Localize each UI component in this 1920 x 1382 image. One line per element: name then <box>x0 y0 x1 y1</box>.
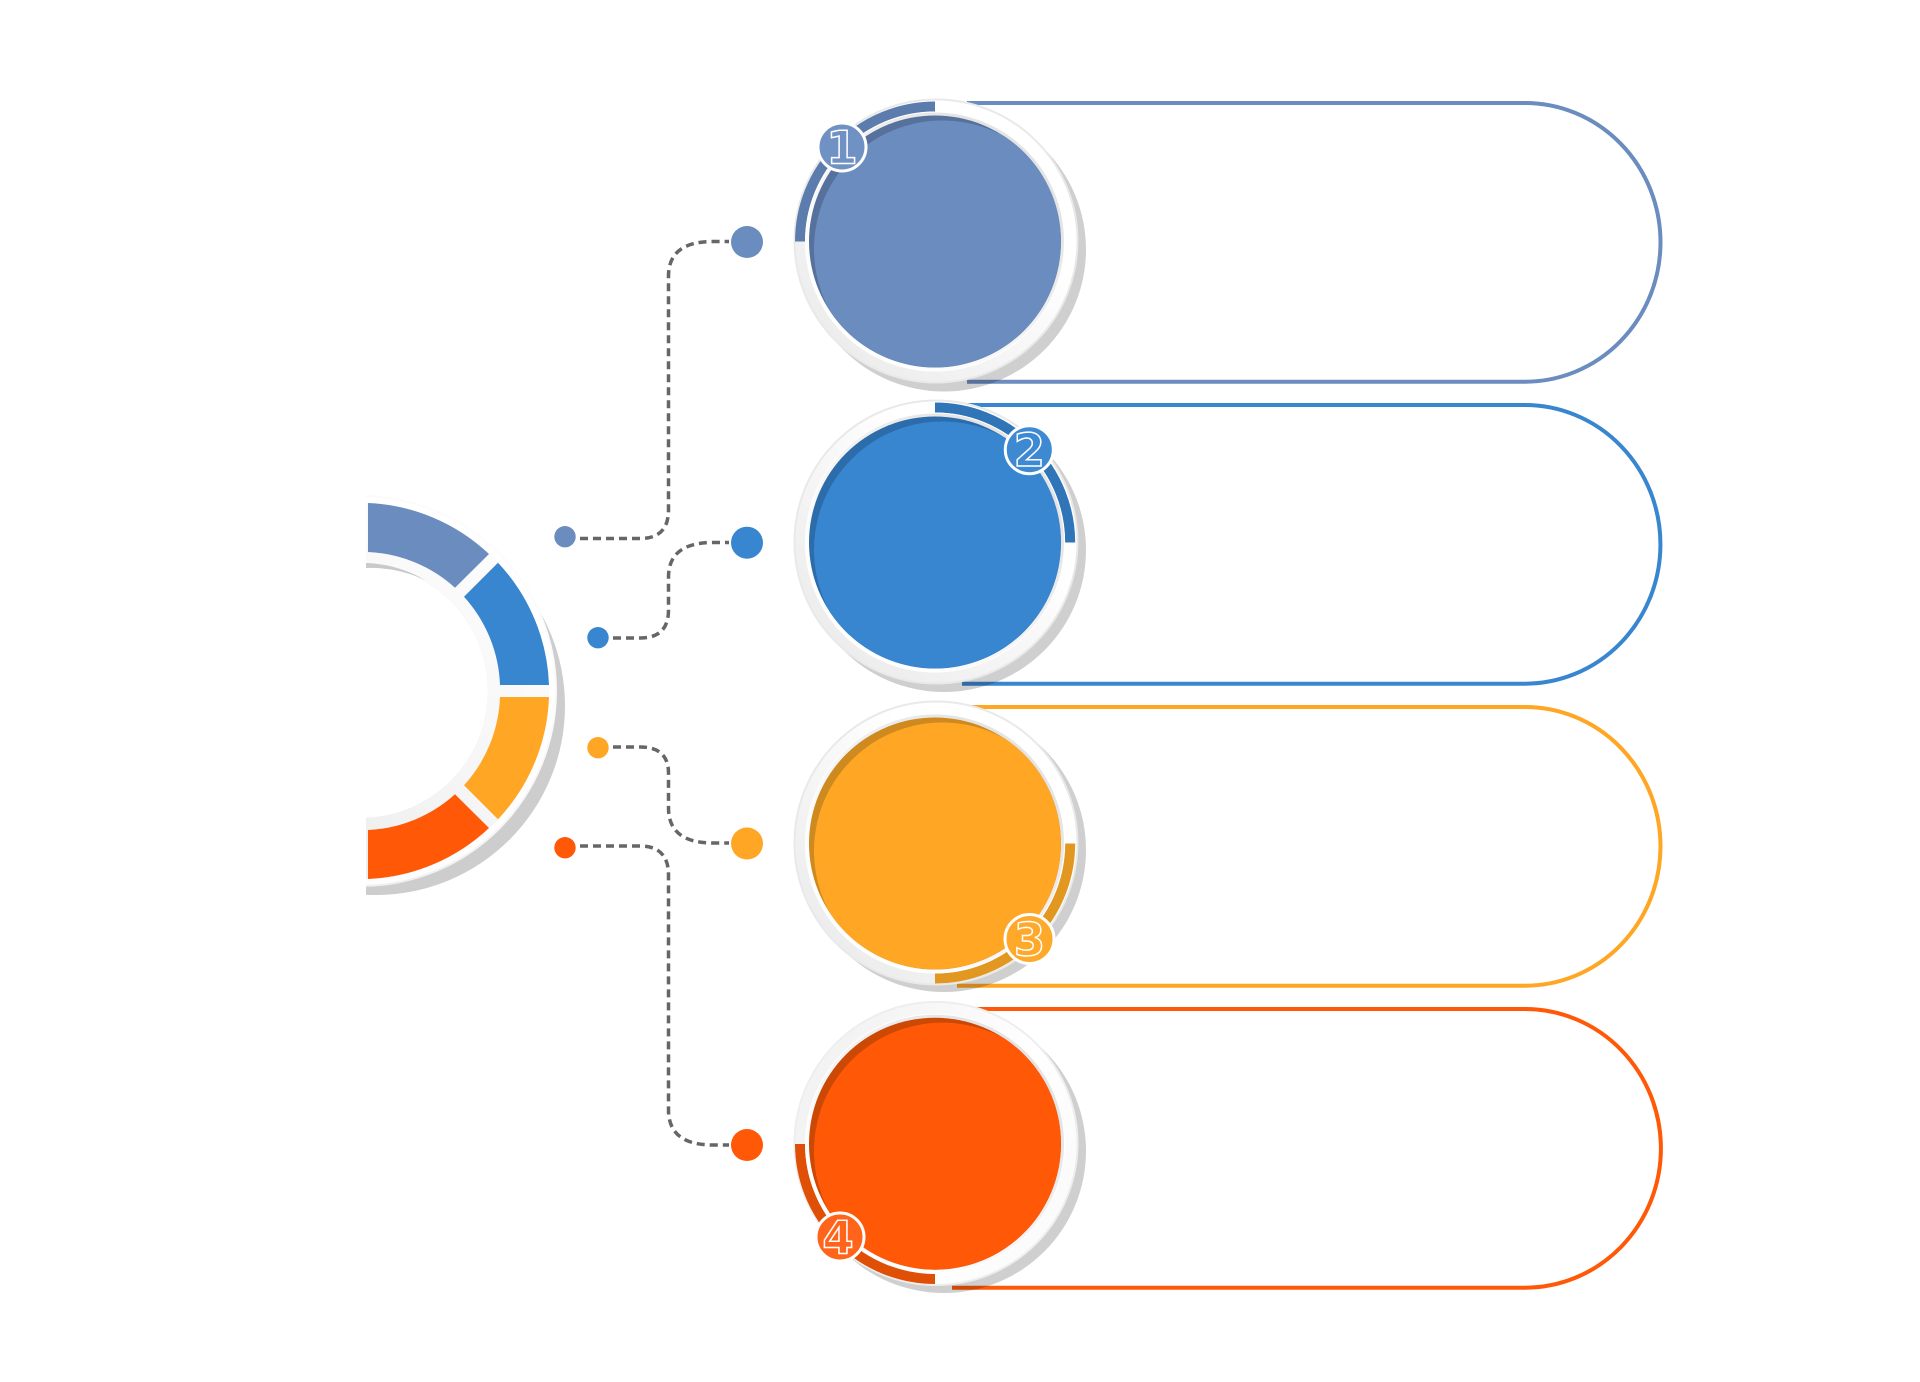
main disc 3 <box>814 722 1061 969</box>
main disc 1 <box>814 120 1061 367</box>
dark disc 1 <box>809 116 1061 368</box>
number 2: 2 <box>1014 424 1045 477</box>
inner ring stroke 4 <box>808 1016 1062 1271</box>
outer ring 2 <box>794 400 1078 684</box>
panel: left semicircular donut <box>366 503 565 895</box>
inner white ring 3 <box>805 714 1065 974</box>
outer ring 1 <box>794 100 1078 382</box>
connector 4 <box>554 837 763 1161</box>
panel: row 2 <box>794 400 1660 692</box>
inner ring stroke 2 <box>808 415 1062 670</box>
dashed line 3 <box>613 747 729 843</box>
number badge 4 <box>816 1212 864 1264</box>
outlined pill 4 <box>952 1009 1661 1288</box>
start dot 3 <box>587 737 609 758</box>
end dot 3 <box>731 828 763 860</box>
connector 1 <box>554 226 763 547</box>
progress arc 2 <box>935 408 1070 542</box>
end dot 2 <box>731 527 763 559</box>
start dot 4 <box>554 837 576 858</box>
outlined pill 1 <box>967 103 1660 382</box>
panel: row 1 <box>794 100 1660 392</box>
inner white ring 4 <box>805 1014 1065 1274</box>
outlined pill 2 <box>962 405 1660 684</box>
connector 3 <box>587 737 763 860</box>
number 1: 1 <box>826 122 858 174</box>
inner white ring 1 <box>805 112 1065 372</box>
end dot 4 <box>731 1129 763 1161</box>
progress arc 3 <box>935 844 1070 978</box>
outer ring 3 <box>794 702 1078 984</box>
inner white ring 2 <box>805 412 1065 672</box>
main disc 2 <box>814 421 1061 668</box>
number 4: 4 <box>822 1212 854 1264</box>
dark disc 3 <box>809 718 1061 970</box>
progress arc 1 <box>800 106 935 242</box>
dashed line 1 <box>580 242 729 538</box>
dark disc 4 <box>809 1018 1061 1270</box>
number badge 1 <box>818 122 866 174</box>
dashed line 2 <box>613 542 729 638</box>
start dot 2 <box>587 627 609 648</box>
inner ring stroke 1 <box>808 114 1062 369</box>
donut inner hole <box>366 568 488 818</box>
dark disc 2 <box>809 416 1061 668</box>
inner ring stroke 3 <box>808 716 1062 971</box>
segment 4 orange <box>368 794 489 879</box>
connector 2 <box>587 527 763 648</box>
segment 1 blue-grey <box>368 503 489 588</box>
end dot 1 <box>731 226 763 258</box>
outlined pill 3 <box>957 707 1660 986</box>
number badge 3 <box>1005 914 1054 966</box>
dashed line 4 <box>580 846 729 1145</box>
circle shadow 3 <box>802 708 1086 992</box>
segment 2 blue <box>464 563 549 685</box>
start dot 1 <box>554 526 576 547</box>
circle shadow 2 <box>802 408 1086 692</box>
circle shadow 1 <box>802 108 1086 392</box>
donut drop shadow <box>366 576 565 895</box>
number badge 2 <box>1005 424 1053 477</box>
inner hole shadow crescent <box>366 563 425 580</box>
outer ring 4 <box>794 1002 1078 1285</box>
segment 3 amber <box>464 697 549 819</box>
main disc 4 <box>814 1023 1061 1270</box>
circle shadow 4 <box>802 1009 1086 1293</box>
panel: row 4 <box>794 1002 1661 1293</box>
donut base ring <box>366 516 557 887</box>
donut white band <box>366 807 512 885</box>
number 3: 3 <box>1014 914 1045 966</box>
progress arc 4 <box>800 1144 935 1279</box>
panel: row 3 <box>794 702 1660 992</box>
